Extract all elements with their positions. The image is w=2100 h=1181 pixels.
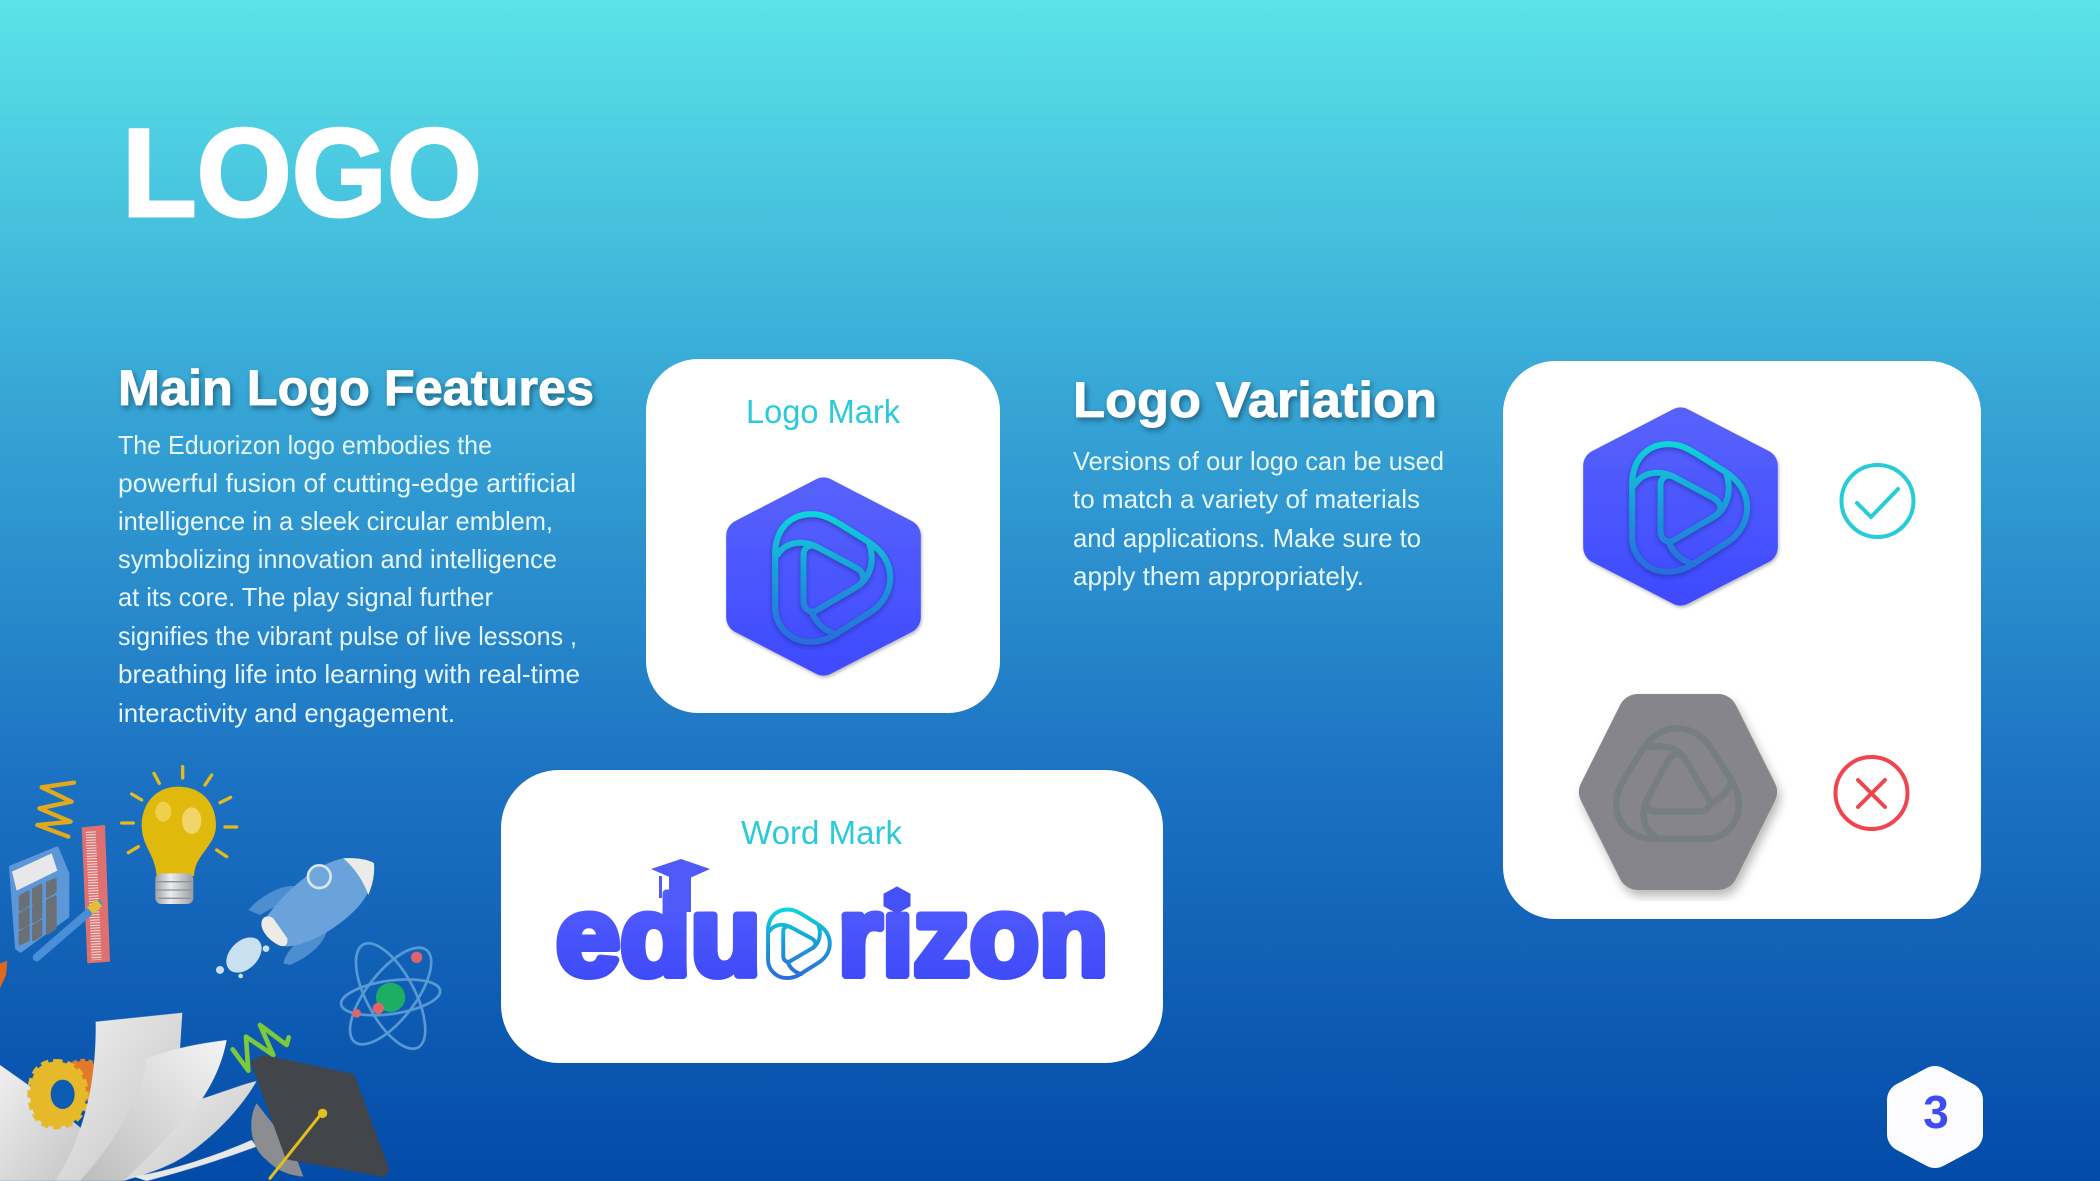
icon: check mark circle xyxy=(1842,465,1914,537)
text block: logo description: breathing life into learning with real-time xyxy=(118,659,580,689)
icon: green spring xyxy=(233,1025,289,1071)
page number badge xyxy=(1905,1084,1965,1150)
icon: cross circle xyxy=(1836,757,1908,829)
illustration: education clip art xyxy=(0,767,445,1181)
text block: variation description xyxy=(1073,446,1444,591)
icon: calculator xyxy=(10,847,68,952)
wordmark: eduorizon: rizon xyxy=(838,874,1108,999)
heading: main logo features: Main Logo Features xyxy=(118,360,594,416)
heading: logo variation: Logo Variation xyxy=(1073,372,1437,428)
icon: correct blue logo xyxy=(1600,424,1761,589)
wordmark: eduorizon xyxy=(556,859,1108,999)
icon: graduation cap on d xyxy=(651,859,710,912)
icon: hexagon dot on i xyxy=(884,887,910,913)
text block: logo description: at its core. The play signal further xyxy=(118,582,493,612)
icon: light bulb xyxy=(122,767,237,904)
icon: blue hexagon logo xyxy=(743,494,904,659)
text block: logo description: interactivity and engagement. xyxy=(118,698,455,728)
text block: variation description: Versions of our logo can be used xyxy=(1073,446,1444,476)
title: LOGO xyxy=(122,104,482,243)
panel: word mark xyxy=(501,770,1163,1063)
text block: variation description: and applications. Make sure to xyxy=(1073,523,1421,553)
label: logo mark: Logo Mark xyxy=(746,393,900,430)
panel: logo mark xyxy=(646,359,1000,713)
wordmark: eduorizon: edu xyxy=(556,874,761,999)
text block: logo description xyxy=(118,430,580,728)
icon: pen xyxy=(37,903,99,957)
text block: logo description: symbolizing innovation and intelligence xyxy=(118,544,557,574)
icon: rocket xyxy=(216,858,374,979)
icon: yellow spring xyxy=(37,783,74,837)
text block: variation description: apply them appropriately. xyxy=(1073,561,1364,591)
panel: logo variations xyxy=(1503,361,1981,919)
text block: logo description: The Eduorizon logo embodies the xyxy=(118,430,492,460)
label: word mark: Word Mark xyxy=(741,814,902,851)
icon: atom xyxy=(336,933,445,1059)
icon: ruler xyxy=(82,825,110,963)
text block: logo description: powerful fusion of cutting-edge artificial xyxy=(118,468,576,498)
icon: gears xyxy=(30,1061,103,1127)
icon: left book page xyxy=(0,1065,83,1181)
icon: mini play mark xyxy=(768,909,830,978)
text block: logo description: intelligence in a sleek circular emblem, xyxy=(118,506,553,536)
text block: variation description: to match a variety of materials xyxy=(1073,484,1420,514)
icon: incorrect grey logo xyxy=(1599,714,1757,870)
icon: open book pages xyxy=(55,1013,257,1181)
text block: logo description: signifies the vibrant pulse of live lessons , xyxy=(118,621,577,651)
icon: graduation cap xyxy=(251,1056,388,1178)
icon: orange gear fragment xyxy=(0,961,7,988)
mask over letter dot xyxy=(874,880,916,909)
page number: 3 xyxy=(1923,1086,1949,1138)
